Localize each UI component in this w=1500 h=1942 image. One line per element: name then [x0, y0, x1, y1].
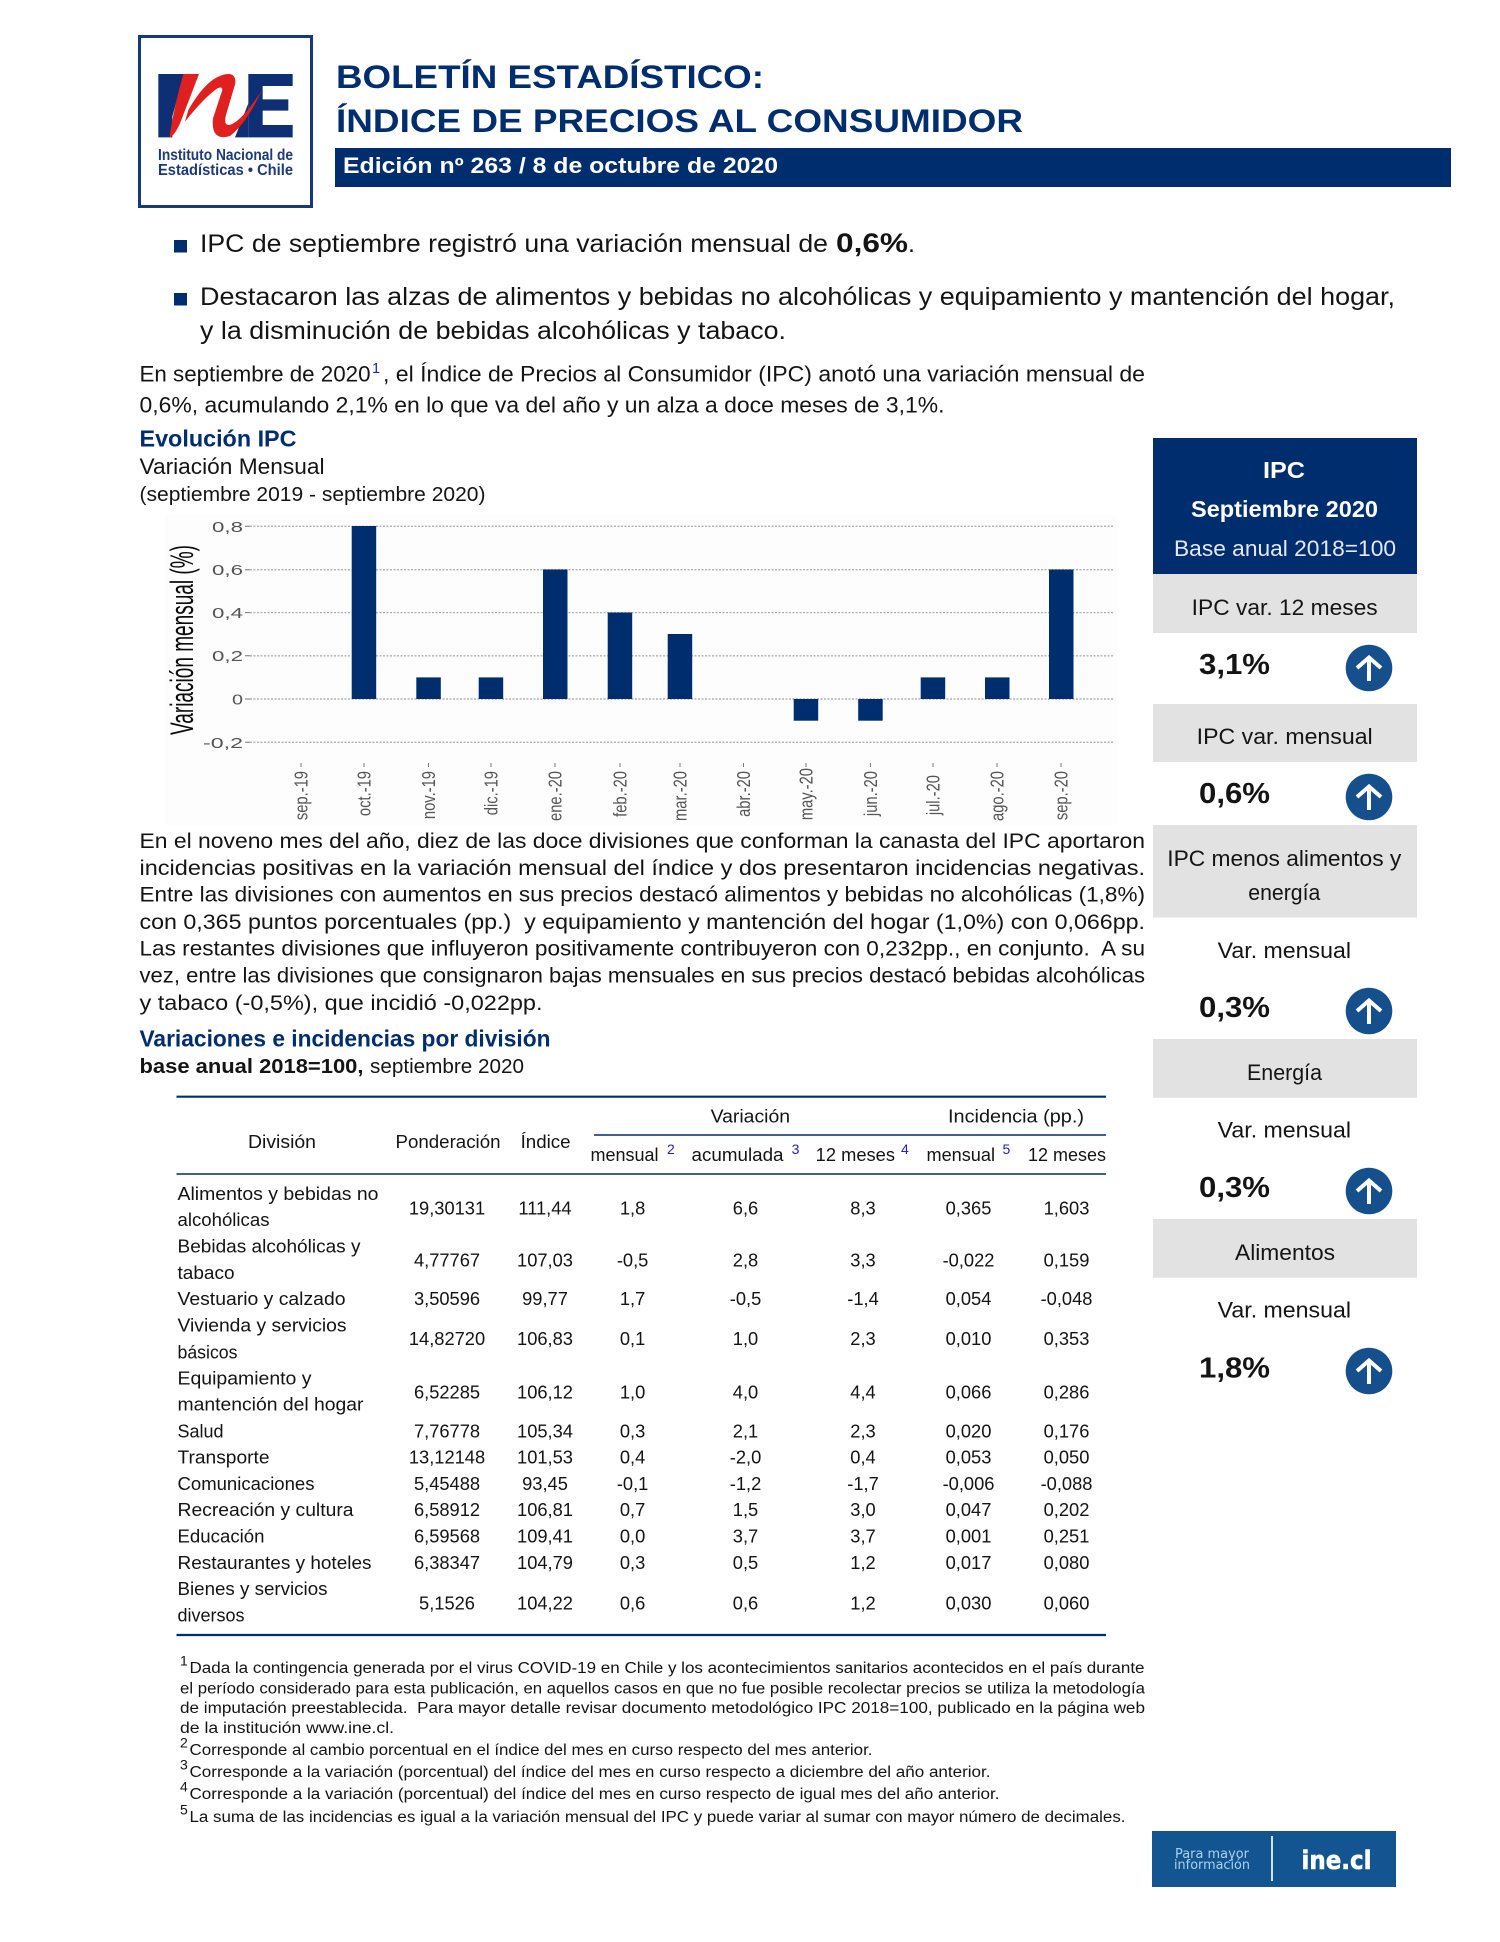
bar chart: variación mensual: [164, 515, 1117, 825]
x axis labels: abr.-20: [733, 771, 754, 817]
x axis labels: dic.-19: [481, 771, 502, 815]
table values: 93,45: [522, 1473, 568, 1494]
table values: 2,8: [733, 1250, 758, 1271]
body paragraph: incidencias positivas en la variación mensual del índice y dos presentaron incidencias negativas.: [140, 856, 1145, 880]
table values: 0,020: [946, 1420, 991, 1441]
sidebar: IPC indicators: [1153, 438, 1417, 1394]
table header: 3: [792, 1141, 800, 1157]
table values: -0,5: [617, 1250, 648, 1271]
key bullet points: Destacaron las alzas de alimentos y bebidas no alcohólicas y equipamiento y mantención del hogar,: [200, 283, 1395, 311]
table values: 3,50596: [414, 1288, 480, 1309]
footer badge: ine.cl: información: [1174, 1857, 1250, 1873]
table values: 19,30131: [409, 1197, 485, 1218]
table heading: [140, 1026, 550, 1078]
table values: 6,52285: [414, 1381, 480, 1402]
table values: 1,603: [1044, 1197, 1089, 1218]
row labels: Educación: [178, 1525, 264, 1546]
table values: 0,159: [1044, 1250, 1089, 1271]
indicator: IPC menos alimentos y energía: IPC menos alimentos y: [1167, 846, 1401, 871]
row labels: Comunicaciones: [178, 1473, 314, 1494]
table values: 5,1526: [419, 1592, 475, 1613]
intro paragraph: 0,6%, acumulando 2,1% en lo que va del año y un alza a doce meses de 3,1%.: [140, 392, 944, 417]
row labels: Bienes y servicios: [178, 1578, 328, 1599]
row labels: Restaurantes y hoteles: [178, 1552, 372, 1573]
title: BOLETÍN ESTADÍSTICO:: [336, 59, 764, 95]
table header: Incidencia (pp.): [948, 1107, 1084, 1127]
table values: 0,017: [946, 1552, 991, 1573]
x axis labels: jun.-20: [860, 771, 881, 817]
footnotes: La suma de las incidencias es igual a la variación mensual del IPC y puede variar al sumar con mayor número de decimales.: [190, 1809, 1126, 1826]
footnotes: Corresponde al cambio porcentual en el índice del mes en curso respecto del mes anterior.: [190, 1742, 872, 1759]
table values: 0,286: [1044, 1381, 1089, 1402]
intro paragraph: [140, 361, 1145, 417]
table values: 5,45488: [414, 1473, 480, 1494]
footnotes: 5: [180, 1802, 188, 1818]
sidebar header: Septiembre 2020: [1191, 496, 1378, 522]
footer badge: ine.cl: [1152, 1831, 1396, 1887]
table values: 107,03: [517, 1250, 573, 1271]
table header: mensual: [926, 1145, 995, 1165]
row labels: Equipamiento y: [178, 1367, 312, 1388]
key bullet points: .: [908, 230, 915, 258]
table values: 1,7: [620, 1288, 645, 1309]
key bullet points: 0,6%: [836, 228, 908, 258]
table values: 0,5: [733, 1552, 758, 1573]
y axis labels: 0,4: [212, 606, 243, 622]
y axis title: Variación mensual (%): [164, 545, 200, 735]
indicator: IPC menos alimentos y energía: 0,3%: [1199, 992, 1270, 1024]
x axis labels: feb.-20: [610, 771, 631, 817]
table values: 7,76778: [414, 1420, 480, 1441]
row labels: básicos: [178, 1341, 238, 1362]
table header: 12 meses: [816, 1145, 895, 1165]
table values: 106,83: [517, 1328, 573, 1349]
footnotes: [180, 1652, 1145, 1826]
table header: 2: [667, 1141, 675, 1157]
x axis labels: sep.-19: [291, 771, 312, 820]
table values: [409, 1197, 1092, 1613]
table values: 0,030: [946, 1592, 991, 1613]
y axis labels: [203, 520, 243, 752]
table values: 0,6: [620, 1592, 645, 1613]
table values: 1,0: [620, 1381, 645, 1402]
table values: 0,4: [850, 1446, 876, 1467]
footer badge: ine.cl: Para mayor: [1175, 1846, 1249, 1862]
footnotes: de la institución www.ine.cl.: [180, 1720, 394, 1737]
row labels: tabaco: [178, 1262, 234, 1283]
sidebar header: IPC: [1263, 457, 1305, 483]
edition banner: [335, 148, 1451, 187]
table header: 5: [1002, 1141, 1010, 1157]
table values: 0,0: [620, 1525, 645, 1546]
x axis labels: sep.-20: [1051, 771, 1072, 820]
row labels: mantención del hogar: [178, 1394, 364, 1415]
table values: 1,5: [733, 1499, 758, 1520]
footnotes: Dada la contingencia generada por el virus COVID-19 en Chile y los acontecimientos sanitarios acontecidos en el país durante: [190, 1660, 1144, 1677]
x axis labels: may.-20: [796, 768, 817, 820]
y axis labels: 0,6: [212, 563, 243, 579]
table header: mensual: [590, 1145, 658, 1165]
table header: 12 meses: [1028, 1145, 1106, 1165]
table values: 1,2: [850, 1552, 876, 1573]
footnotes: 4: [180, 1778, 188, 1794]
table values: 3,0: [850, 1499, 876, 1520]
table values: 8,3: [850, 1197, 876, 1218]
sidebar header: [1153, 438, 1417, 574]
indicator: IPC menos alimentos y energía: energía: [1248, 880, 1321, 905]
table values: -0,022: [943, 1250, 994, 1271]
table values: 0,054: [946, 1288, 991, 1309]
row labels: Transporte: [178, 1446, 270, 1467]
row labels: Vestuario y calzado: [178, 1288, 346, 1309]
chart heading: Variación Mensual: [140, 454, 324, 479]
indicator: Energía: Energía: [1247, 1060, 1323, 1085]
table values: 104,22: [517, 1592, 573, 1613]
table header: 4: [901, 1141, 909, 1157]
table values: -0,006: [943, 1473, 994, 1494]
table heading: septiembre 2020: [370, 1056, 524, 1078]
row labels: Vivienda y servicios: [178, 1315, 346, 1336]
intro paragraph: En septiembre de 2020: [140, 362, 370, 387]
indicator: Alimentos: 1,8%: [1199, 1353, 1270, 1385]
indicator: Alimentos: [1153, 1219, 1417, 1394]
table values: 3,3: [850, 1250, 876, 1271]
footnotes: 1: [180, 1652, 188, 1668]
table header: División: [248, 1132, 316, 1152]
table values: 14,82720: [409, 1328, 485, 1349]
body paragraph: y tabaco (-0,5%), que incidió -0,022pp.: [140, 991, 542, 1015]
table values: 2,3: [850, 1328, 876, 1349]
row labels: Recreación y cultura: [178, 1499, 354, 1520]
indicator: IPC var. 12 meses: IPC var. 12 meses: [1192, 595, 1378, 620]
footnotes: Corresponde a la variación (porcentual) del índice del mes en curso respecto de igual mes del año anterior.: [190, 1786, 1000, 1803]
edition banner: Edición nº 263 / 8 de octubre de 2020: [343, 153, 778, 178]
table: variaciones e incidencias: [176, 1097, 1106, 1635]
title: [336, 59, 1023, 139]
body paragraph: vez, entre las divisiones que consignaron bajas mensuales en sus precios destacó bebidas alcohólicas: [140, 964, 1145, 988]
bars: [352, 526, 1074, 721]
table values: 0,060: [1044, 1592, 1089, 1613]
table values: 0,365: [946, 1197, 991, 1218]
table values: 0,1: [620, 1328, 645, 1349]
table values: 4,4: [850, 1381, 876, 1402]
table values: 99,77: [522, 1288, 568, 1309]
x axis labels: ene.-20: [545, 771, 566, 821]
table values: -1,2: [730, 1473, 761, 1494]
x axis labels: [291, 768, 1072, 821]
x axis labels: nov.-19: [418, 771, 439, 819]
table values: 0,050: [1044, 1446, 1089, 1467]
key bullet points: [174, 228, 1395, 345]
table values: 109,41: [517, 1525, 573, 1546]
table values: 2,3: [850, 1420, 876, 1441]
row labels: [178, 1183, 378, 1626]
table values: 105,34: [517, 1420, 573, 1441]
table values: 106,81: [517, 1499, 573, 1520]
footnotes: Corresponde a la variación (porcentual) del índice del mes en curso respecto a diciembre del año anterior.: [190, 1764, 990, 1781]
table values: 0,202: [1044, 1499, 1089, 1520]
table values: 104,79: [517, 1552, 573, 1573]
table values: -0,088: [1041, 1473, 1092, 1494]
table heading: base anual 2018=100,: [140, 1056, 364, 1078]
indicator: Alimentos: Var. mensual: [1218, 1298, 1351, 1323]
table values: 0,353: [1044, 1328, 1089, 1349]
table values: 6,38347: [414, 1552, 480, 1573]
table values: 0,047: [946, 1499, 991, 1520]
indicator: IPC var. mensual: [1153, 704, 1417, 820]
row labels: alcohólicas: [178, 1209, 270, 1230]
table values: 0,176: [1044, 1420, 1089, 1441]
body paragraph: con 0,365 puntos porcentuales (pp.) y equipamiento y mantención del hogar (1,0%) con 0,066pp.: [140, 910, 1145, 934]
table header: Variación: [711, 1107, 790, 1127]
table values: 101,53: [517, 1446, 573, 1467]
sidebar header: Base anual 2018=100: [1174, 536, 1396, 561]
indicator: IPC var. mensual: 0,6%: [1199, 778, 1270, 810]
body paragraph: Entre las divisiones con aumentos en sus precios destacó alimentos y bebidas no alcohólicas (1,8%): [140, 883, 1145, 907]
table values: 1,0: [733, 1328, 758, 1349]
table header: acumulada: [692, 1145, 785, 1165]
table values: -0,5: [730, 1288, 761, 1309]
intro paragraph: 1: [372, 361, 380, 377]
table header: [248, 1107, 1106, 1165]
y axis labels: 0,2: [212, 649, 243, 665]
table values: 111,44: [518, 1197, 572, 1218]
x axis labels: ago.-20: [987, 771, 1008, 821]
table values: 6,58912: [414, 1499, 480, 1520]
logo: INE: Instituto Nacional de: [158, 147, 293, 164]
table values: 6,6: [733, 1197, 758, 1218]
logo: INE: [140, 36, 312, 206]
table values: -1,7: [847, 1473, 879, 1494]
axis tick marks: [245, 526, 1061, 767]
table heading: Variaciones e incidencias por división: [140, 1026, 550, 1052]
key bullet points: IPC de septiembre registró una variación mensual de: [200, 230, 828, 258]
footnotes: 3: [180, 1756, 188, 1772]
table values: 106,12: [517, 1381, 573, 1402]
footnotes: de imputación preestablecida. Para mayor detalle revisar documento metodológico IPC 2018=100, publicado en la página web: [180, 1700, 1145, 1717]
title: ÍNDICE DE PRECIOS AL CONSUMIDOR: [336, 103, 1023, 139]
indicator: IPC var. mensual: IPC var. mensual: [1197, 724, 1373, 749]
indicator: IPC menos alimentos y energía: Var. mensual: [1218, 938, 1351, 963]
table header: Ponderación: [396, 1132, 500, 1152]
logo: INE: Estadísticas • Chile: [158, 162, 293, 179]
table values: -0,048: [1041, 1288, 1092, 1309]
table values: 0,3: [620, 1420, 645, 1441]
table values: 0,080: [1044, 1552, 1089, 1573]
indicator: IPC var. 12 meses: 3,1%: [1199, 649, 1270, 681]
indicator: Alimentos: Alimentos: [1235, 1240, 1335, 1265]
x axis labels: mar.-20: [670, 771, 691, 821]
body paragraph: Las restantes divisiones que influyeron positivamente contribuyeron con 0,232pp., en conjunto. A su: [140, 937, 1145, 961]
table header: Índice: [521, 1132, 571, 1152]
x axis labels: jul.-20: [923, 775, 944, 816]
y axis labels: 0,8: [212, 520, 243, 536]
indicator: Energía: Var. mensual: [1218, 1118, 1351, 1143]
table values: 0,6: [733, 1592, 758, 1613]
footnotes: el período considerado para esta publicación, en aquellos casos en que no fue posible recolectar precios se utiliza la metodología: [180, 1680, 1145, 1698]
table values: 0,053: [946, 1446, 991, 1467]
indicator: IPC var. 12 meses: [1153, 574, 1417, 691]
table values: -1,4: [847, 1288, 879, 1309]
table values: -0,1: [617, 1473, 648, 1494]
indicator: IPC menos alimentos y energía: [1153, 825, 1417, 1034]
intro paragraph: , el Índice de Precios al Consumidor (IPC) anotó una variación mensual de: [383, 362, 1145, 387]
chart heading: [140, 426, 486, 506]
chart heading: (septiembre 2019 - septiembre 2020): [140, 484, 486, 506]
table values: 2,1: [733, 1420, 758, 1441]
row labels: Bebidas alcohólicas y: [178, 1235, 361, 1256]
table values: 1,8: [620, 1197, 645, 1218]
table values: 0,001: [946, 1525, 991, 1546]
table values: 3,7: [850, 1525, 876, 1546]
table values: 4,77767: [414, 1250, 480, 1271]
chart heading: Evolución IPC: [140, 426, 296, 452]
table values: 0,010: [946, 1328, 991, 1349]
table values: 1,2: [850, 1592, 876, 1613]
body paragraph: [140, 829, 1145, 1015]
key bullet points: y la disminución de bebidas alcohólicas y tabaco.: [200, 317, 786, 345]
y axis labels: 0: [232, 692, 243, 708]
table values: 0,7: [620, 1499, 645, 1520]
table values: -2,0: [730, 1446, 761, 1467]
table values: 0,251: [1044, 1525, 1089, 1546]
table values: 6,59568: [414, 1525, 480, 1546]
table values: 13,12148: [409, 1446, 485, 1467]
table values: 0,4: [620, 1446, 645, 1467]
table values: 0,3: [620, 1552, 645, 1573]
row labels: Alimentos y bebidas no: [178, 1183, 378, 1204]
y axis labels: -0,2: [203, 736, 243, 752]
table values: 0,066: [946, 1381, 991, 1402]
body paragraph: En el noveno mes del año, diez de las doce divisiones que conforman la canasta del IPC aportaron: [140, 829, 1145, 853]
footer badge: ine.cl: ine.cl: [1302, 1846, 1372, 1876]
indicator: Energía: 0,3%: [1199, 1172, 1270, 1204]
row labels: diversos: [178, 1605, 244, 1626]
table values: 3,7: [733, 1525, 758, 1546]
x axis labels: oct.-19: [354, 771, 375, 816]
row labels: Salud: [178, 1420, 224, 1441]
indicator: Energía: [1153, 1039, 1417, 1214]
footnotes: 2: [180, 1734, 188, 1750]
table values: 4,0: [733, 1381, 758, 1402]
